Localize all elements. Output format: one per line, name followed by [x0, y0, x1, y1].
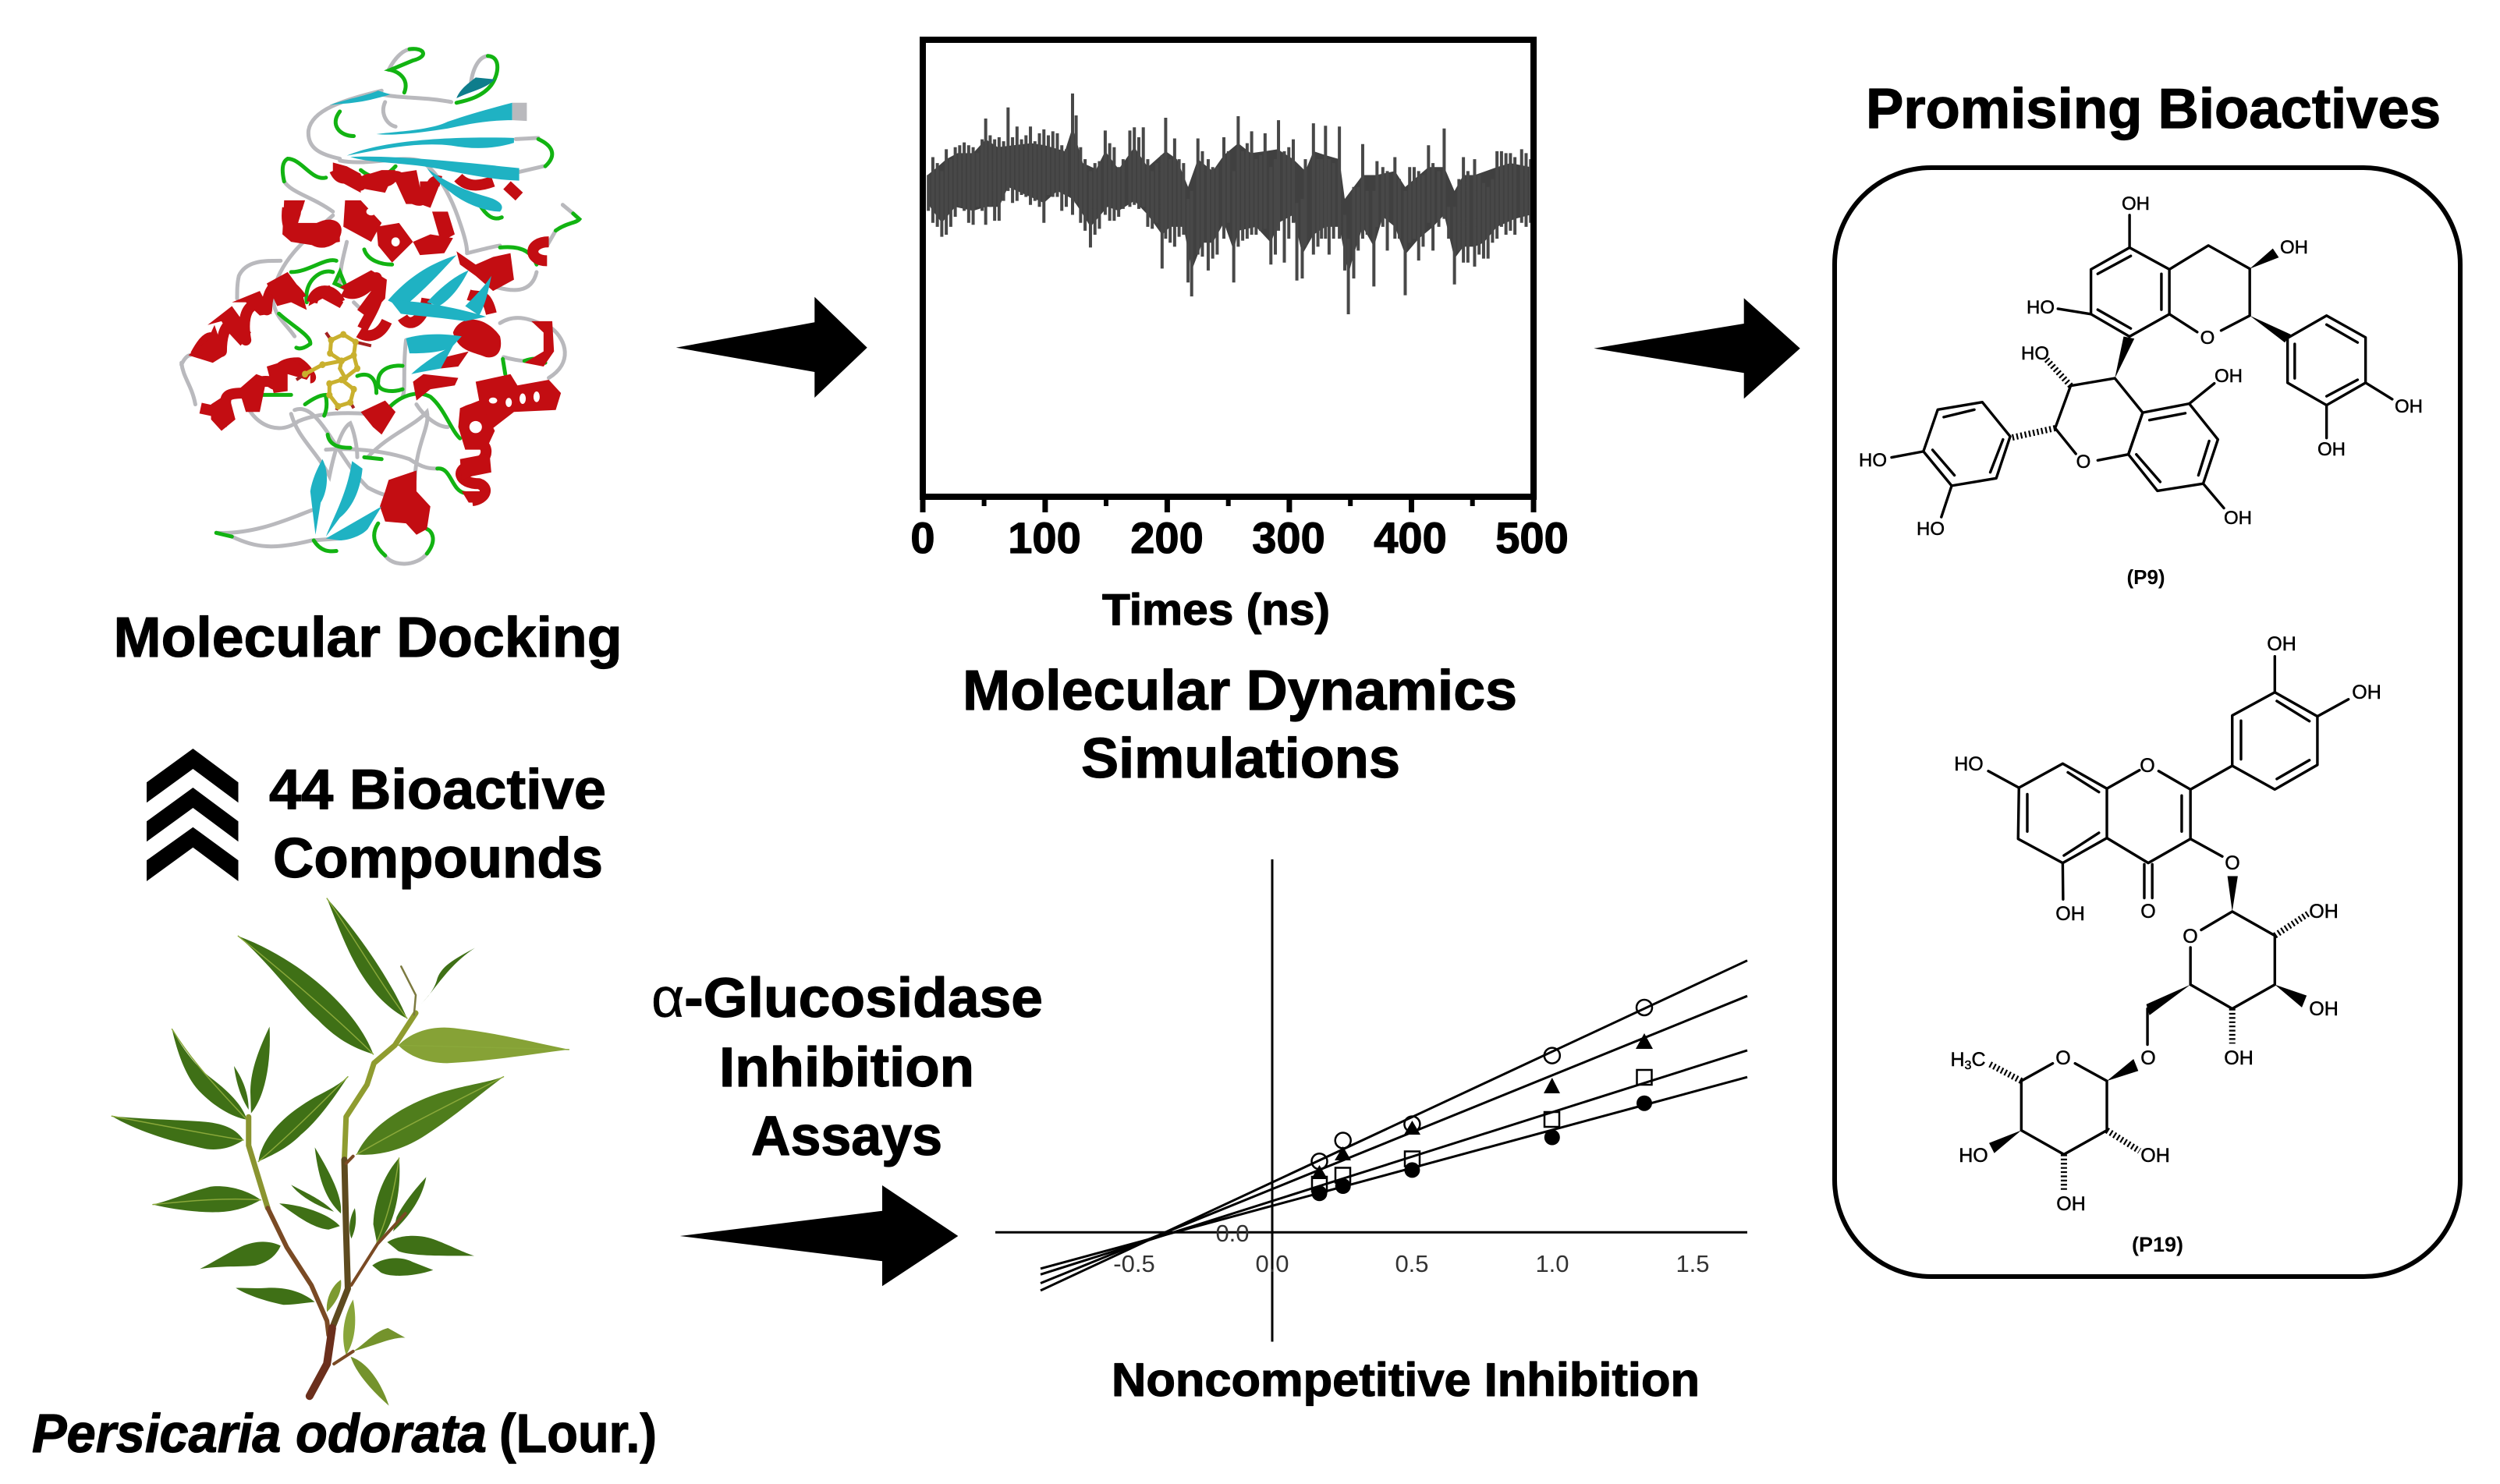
illustration: Persicaria odorata plant: [112, 898, 569, 1406]
panel: promising bioactives: [1835, 168, 2460, 1277]
P9 atom labels: [1859, 193, 2423, 540]
P19 atom labels: H: [1950, 1049, 1965, 1071]
x axis minor ticks: [984, 497, 1473, 506]
panel frame: [1835, 168, 2460, 1277]
P19 atom labels: O: [2140, 901, 2156, 923]
icon: stacked up chevrons: [147, 749, 239, 881]
heading: Promising Bioactives: Promising Bioactives: [1866, 78, 2441, 140]
protein grey strand end: [512, 103, 527, 121]
P19 stereo bonds: [1988, 876, 2309, 1190]
x axis labels: 300: [1252, 513, 1325, 562]
markers: open squares: [1312, 1070, 1652, 1192]
protein red helix masses: [189, 162, 561, 535]
P9 stereo bonds: [2010, 249, 2291, 438]
P19 atom labels: O: [2225, 852, 2240, 874]
P19 atom labels: OH: [2352, 682, 2381, 703]
icon: protein ribbon structure: [182, 49, 580, 564]
chart: molecular dynamics trace: [910, 40, 1569, 635]
plant leaf midribs: [112, 898, 569, 1242]
heading: Molecular Dynamics Simulations: Simulations: [1081, 728, 1400, 790]
axis labels: 0.0: [1215, 1220, 1250, 1247]
protein helix turn gaps: [301, 208, 540, 433]
horizontal axis: [995, 1231, 1747, 1234]
plant leaves: [112, 898, 569, 1406]
heading: 44 Bioactive Compounds: 44 Bioactive: [269, 759, 606, 821]
P19 atom labels: [1950, 633, 2381, 1215]
caption: Noncompetitive Inhibition: Noncompetitive Inhibition: [1112, 1354, 1700, 1406]
heading: 44 Bioactive Compounds: Compounds: [273, 827, 603, 890]
P19 atom labels: OH: [2224, 1047, 2254, 1069]
axes: [1271, 859, 1273, 1341]
protein red alpha helices: [195, 170, 549, 501]
P19 atom labels: OH: [2309, 998, 2339, 1020]
P19 label: (P19): [2132, 1233, 2183, 1256]
structure: P9: [1859, 193, 2423, 589]
protein dark teal strand: [456, 77, 495, 98]
plant stems: [249, 966, 416, 1396]
P9 atom labels: OH: [2122, 193, 2150, 214]
x axis labels: 500: [1495, 513, 1569, 562]
P19 bonds: [1988, 657, 2349, 1154]
markers: open circles: [1312, 1000, 1652, 1169]
trace dense core: [927, 127, 1530, 274]
heading: alpha-Glucosidase Inhibition Assays: α-Glucosidase: [651, 968, 1043, 1029]
P9 atom labels: OH: [2280, 237, 2308, 258]
caption: Persicaria odorata (Lour.): Persicaria odorata: [32, 1403, 487, 1464]
P9 atom labels: O: [2076, 452, 2090, 473]
P9 atom labels: HO: [1859, 450, 1887, 471]
P19 atom labels: HO: [1954, 753, 1984, 775]
protein green loop segments: [216, 49, 580, 555]
heading: Molecular Dynamics Simulations: [963, 660, 1517, 790]
P9 atom labels: OH: [2395, 396, 2423, 417]
axis labels: 1.0: [1535, 1250, 1569, 1277]
protein cyan beta strands: [310, 90, 520, 540]
trace: [927, 94, 1530, 314]
arrow: dynamics to bioactives: [1594, 298, 1800, 398]
caption: Persicaria odorata (Lour.): (Lour.): [499, 1403, 657, 1464]
P19 atom labels: OH: [2267, 633, 2296, 655]
P9 atom labels: OH: [2317, 439, 2346, 460]
x axis labels: 200: [1130, 513, 1204, 562]
P9 atom labels: HO: [2021, 343, 2049, 364]
trace spikes: [928, 94, 1530, 314]
heading: Molecular Dynamics Simulations: Molecular Dynamics: [963, 660, 1517, 722]
axis labels: 0.0: [1255, 1250, 1289, 1277]
P9 atom labels: OH: [2215, 366, 2243, 387]
heading: 44 Bioactive Compounds: [269, 759, 606, 890]
P19 atom labels: O: [2140, 755, 2155, 777]
markers: filled circles: [1312, 1096, 1652, 1201]
P19 atom labels: O: [2140, 1047, 2156, 1069]
P9 atom labels: OH: [2224, 508, 2252, 529]
P19 atom labels: HO: [1959, 1145, 1988, 1167]
heading: Molecular Docking: Molecular Docking: [114, 607, 622, 669]
regression lines: [1041, 961, 1747, 1291]
heading: alpha-Glucosidase Inhibition Assays: Inhibition: [719, 1037, 974, 1099]
icon: docked ligand: [296, 331, 371, 410]
P19 atom labels: C: [1971, 1049, 1986, 1071]
axis labels: 1.5: [1676, 1250, 1710, 1277]
P9 atom labels: HO: [2027, 297, 2055, 318]
plot frame: [923, 40, 1534, 497]
P19 atom labels: O: [2183, 926, 2198, 947]
chart: Lineweaver-Burk plot: [995, 859, 1747, 1341]
P9 atom labels: HO: [1917, 519, 1945, 540]
P19 atom labels: O: [2055, 1047, 2071, 1069]
protein coil loops: [182, 49, 573, 564]
x axis ticks: [923, 497, 1534, 512]
P19 atom labels: 3: [1965, 1059, 1972, 1072]
P19 atom labels: OH: [2055, 903, 2085, 925]
P9 atom labels: O: [2200, 328, 2215, 349]
P19 atom labels: OH: [2056, 1193, 2086, 1215]
P19 atom labels: OH: [2309, 901, 2339, 923]
x axis labels: 100: [1008, 513, 1081, 562]
axis labels: [1113, 1220, 1710, 1277]
P19 atom labels: OH: [2140, 1145, 2170, 1167]
arrow: docking to dynamics: [676, 297, 867, 398]
x axis labels: 0: [910, 513, 935, 562]
structure: P19: [1950, 633, 2381, 1256]
heading: alpha-Glucosidase Inhibition Assays: Assays: [751, 1106, 942, 1167]
markers: filled triangles: [1311, 1033, 1653, 1179]
x axis title: Times (ns): [1102, 585, 1330, 635]
heading: alpha-Glucosidase Inhibition Assays: [651, 968, 1043, 1167]
axis labels: 0.5: [1395, 1250, 1429, 1277]
x axis labels: 400: [1374, 513, 1447, 562]
P9 label: (P9): [2126, 565, 2165, 589]
axis labels: -0.5: [1113, 1250, 1155, 1277]
x axis labels: [910, 513, 1569, 562]
P9 bonds: [1892, 215, 2392, 517]
arrow: assays to inhibition plot: [680, 1185, 958, 1286]
